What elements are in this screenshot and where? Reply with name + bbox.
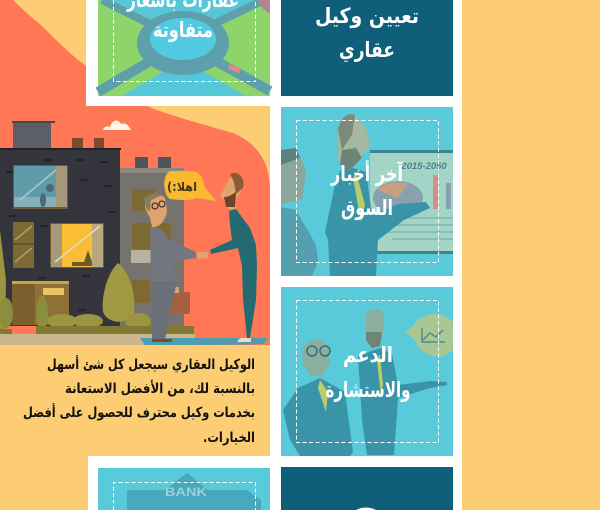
panel: different prices tile [98, 0, 270, 96]
tile title [326, 343, 410, 402]
tile title: والاستشارة [326, 378, 410, 402]
panel: appoint agent tile [281, 0, 453, 96]
description text: الخيارات. [203, 430, 255, 446]
icon: white circle [356, 507, 376, 510]
panel: bank tile [98, 468, 270, 510]
tile title: متفاوتة [153, 18, 213, 42]
tile title: آخر أخبار [330, 159, 404, 186]
white column [270, 0, 462, 510]
panel: market news tile [281, 107, 453, 276]
tall man figure [358, 309, 447, 455]
entrance [12, 281, 69, 325]
illustration: houses and handshake [0, 120, 268, 345]
bank building: BANK [165, 487, 208, 499]
dashed frame [114, 482, 256, 510]
tile title: عقاري [339, 38, 395, 63]
dashed frame [296, 120, 438, 262]
tile title [315, 4, 419, 63]
coral background shape [0, 0, 270, 345]
gray building [120, 157, 184, 326]
presentation board: 2015-2050 [400, 161, 447, 172]
briefcase [167, 287, 190, 314]
rooftop tank [12, 121, 104, 148]
plants [0, 230, 194, 334]
ground [0, 334, 195, 345]
dark building [0, 148, 121, 326]
description text: بالنسبة لك، من الأفضل الاستعانة [65, 380, 255, 397]
description text: الوكيل العقاري سيجعل كل شئ أسهل [47, 355, 255, 374]
dashed frame [296, 300, 438, 442]
tile title [126, 0, 239, 42]
tile title: تعيين وكيل [315, 4, 419, 28]
white frame: bottom left card [88, 456, 270, 510]
panel: support and consulting tile [281, 287, 453, 456]
description text [23, 355, 255, 446]
tile title: السوق [341, 196, 393, 220]
floor mat [140, 338, 268, 345]
window: upstairs room [13, 165, 68, 209]
man in gray suit [144, 192, 208, 342]
dashed frame [114, 0, 256, 82]
short man figure [283, 340, 353, 456]
speech bubble [164, 171, 216, 201]
speech bubble with chart [405, 314, 453, 356]
bank building [127, 473, 261, 510]
icon: cloud [103, 120, 131, 130]
description text: بخدمات وكيل محترف للحصول على أفضل [23, 403, 255, 421]
presenter figure [325, 114, 430, 276]
speech bubble: اهلا:) [167, 180, 197, 194]
white frame: top left card [86, 0, 270, 106]
second man figure [281, 148, 318, 276]
window: lit room [50, 223, 104, 268]
road map [98, 0, 270, 96]
tile title: الدعم [343, 343, 393, 367]
window: narrow [13, 222, 34, 268]
panel: dark tile with icon [281, 467, 453, 510]
tile title [330, 159, 404, 220]
man in teal suit [210, 173, 257, 342]
presentation board [370, 150, 453, 254]
